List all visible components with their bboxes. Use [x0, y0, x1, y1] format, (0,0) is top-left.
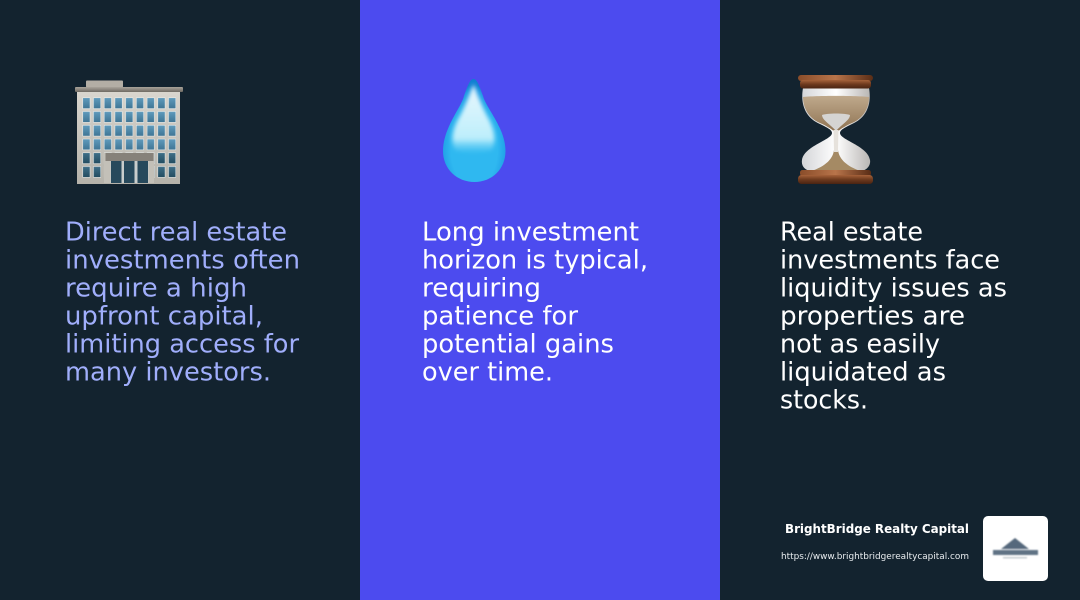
text: liquidity issues: [780, 218, 1007, 416]
text: high upfront capital: limiting access for: [65, 330, 300, 360]
footer: website url: https://www.brightbridgerealtycapital.com: [781, 552, 969, 562]
text: liquidity issues: liquidity issues as: [780, 274, 1007, 304]
text: long investment horizon: potential gains: [422, 330, 614, 360]
text: high upfront capital: investments often: [65, 246, 300, 276]
text: liquidity issues: investments face: [780, 246, 1000, 276]
text: liquidity issues: liquidated as: [780, 358, 946, 388]
text: long investment horizon: horizon is typical,: [422, 246, 648, 276]
text: high upfront capital: many investors.: [65, 358, 271, 388]
text: liquidity issues: properties are: [780, 302, 965, 332]
text: high upfront capital: Direct real estate: [65, 218, 287, 248]
text: high upfront capital: [65, 218, 300, 388]
footer: company logo: [983, 516, 1048, 581]
text: long investment horizon: requiring: [422, 274, 541, 304]
text: liquidity issues: Real estate: [780, 218, 923, 248]
panel: high upfront capital: [0, 0, 360, 600]
icon: water drop: [443, 79, 506, 182]
icon: office building: [75, 80, 183, 184]
footer: company name: BrightBridge Realty Capital: [785, 521, 969, 536]
text: long investment horizon: [422, 218, 648, 388]
panel: liquidity issues: [720, 0, 1080, 600]
text: liquidity issues: stocks.: [780, 386, 868, 416]
text: high upfront capital: require a high: [65, 274, 247, 304]
text: liquidity issues: not as easily: [780, 330, 940, 360]
text: long investment horizon: patience for: [422, 302, 579, 332]
text: long investment horizon: over time.: [422, 358, 553, 388]
text: high upfront capital: upfront capital,: [65, 302, 263, 332]
icon: hourglass: [798, 75, 873, 184]
text: long investment horizon: Long investment: [422, 218, 639, 248]
panel: long investment horizon: [360, 0, 720, 600]
